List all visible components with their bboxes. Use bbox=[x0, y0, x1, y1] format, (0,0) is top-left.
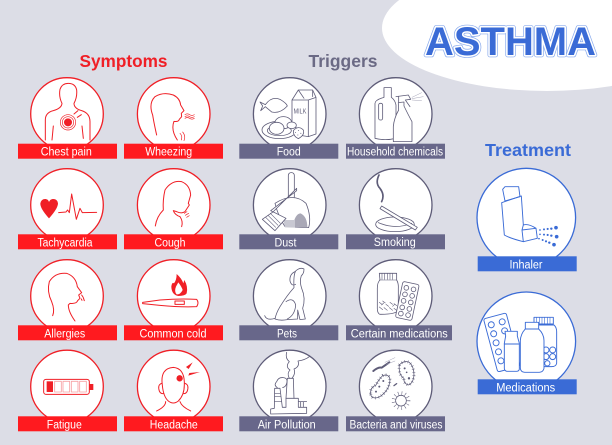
heading: treatment: Treatment bbox=[485, 140, 571, 160]
icon: common cold bbox=[143, 274, 198, 307]
icon: cough bbox=[155, 181, 191, 227]
label: dust: Dust bbox=[274, 237, 297, 249]
panel: dust bbox=[239, 169, 338, 249]
label: headache: Headache bbox=[150, 419, 198, 431]
title: ASTHMA bbox=[425, 20, 596, 64]
label: pets: Pets bbox=[277, 328, 297, 340]
label: smoking: Smoking bbox=[374, 237, 416, 249]
panel: fatigue bbox=[18, 350, 117, 431]
icon: pets bbox=[265, 268, 305, 320]
panel: air pollution bbox=[239, 350, 338, 431]
panel: allergies bbox=[18, 260, 117, 340]
panel: certain medications bbox=[346, 260, 452, 340]
label: air pollution: Air Pollution bbox=[258, 419, 316, 431]
icon: wheezing bbox=[151, 94, 194, 141]
icon: headache bbox=[157, 362, 200, 411]
icon: chest pain bbox=[45, 83, 90, 140]
label: tachycardia: Tachycardia bbox=[38, 237, 93, 249]
label: inhaler: Inhaler bbox=[510, 259, 543, 271]
label: medications: Medications bbox=[496, 382, 555, 394]
icon: medications bbox=[483, 313, 557, 372]
label: cough: Cough bbox=[154, 237, 186, 249]
label: allergies: Allergies bbox=[44, 328, 85, 340]
title: ASTHMA bbox=[425, 20, 596, 64]
label: fatigue: Fatigue bbox=[47, 419, 82, 431]
icon: food: MILK bbox=[294, 108, 307, 115]
panel: headache bbox=[124, 350, 223, 431]
label: wheezing: Wheezing bbox=[145, 147, 192, 159]
icon: allergies bbox=[48, 273, 84, 321]
panel: wheezing bbox=[124, 78, 223, 159]
icon: smoking bbox=[376, 175, 417, 232]
icon: household chemicals bbox=[375, 88, 423, 142]
icon: air pollution bbox=[271, 352, 309, 414]
label: food: Food bbox=[277, 147, 301, 159]
icon: tachycardia bbox=[40, 194, 97, 219]
icon: dust bbox=[262, 173, 310, 231]
panel: food bbox=[239, 78, 338, 159]
panel: chest pain bbox=[18, 78, 117, 159]
label: household chemicals: Household chemicals bbox=[347, 146, 443, 158]
icon: bacteria and viruses bbox=[371, 358, 414, 408]
panel: tachycardia bbox=[18, 169, 117, 249]
panel: medications bbox=[477, 292, 577, 394]
heading: symptoms: Symptoms bbox=[80, 51, 168, 71]
heading: triggers: Triggers bbox=[308, 51, 378, 71]
panel: smoking bbox=[346, 169, 445, 249]
panel: inhaler bbox=[477, 168, 577, 271]
label: common cold: Common cold bbox=[140, 328, 206, 340]
label: bacteria and viruses: Bacteria and viruses bbox=[350, 419, 443, 431]
icon: certain medications bbox=[377, 273, 419, 321]
title bbox=[382, 0, 612, 91]
panel: pets bbox=[239, 260, 338, 340]
panel: bacteria and viruses bbox=[346, 350, 445, 431]
panel: household chemicals bbox=[346, 78, 445, 159]
label: certain medications: Certain medications bbox=[351, 328, 448, 340]
panel: common cold bbox=[124, 260, 223, 340]
title: ASTHMA bbox=[425, 20, 596, 64]
icon: fatigue bbox=[44, 379, 93, 394]
label: chest pain: Chest pain bbox=[41, 147, 92, 159]
panel: cough bbox=[124, 169, 223, 249]
icon: inhaler bbox=[502, 187, 558, 246]
